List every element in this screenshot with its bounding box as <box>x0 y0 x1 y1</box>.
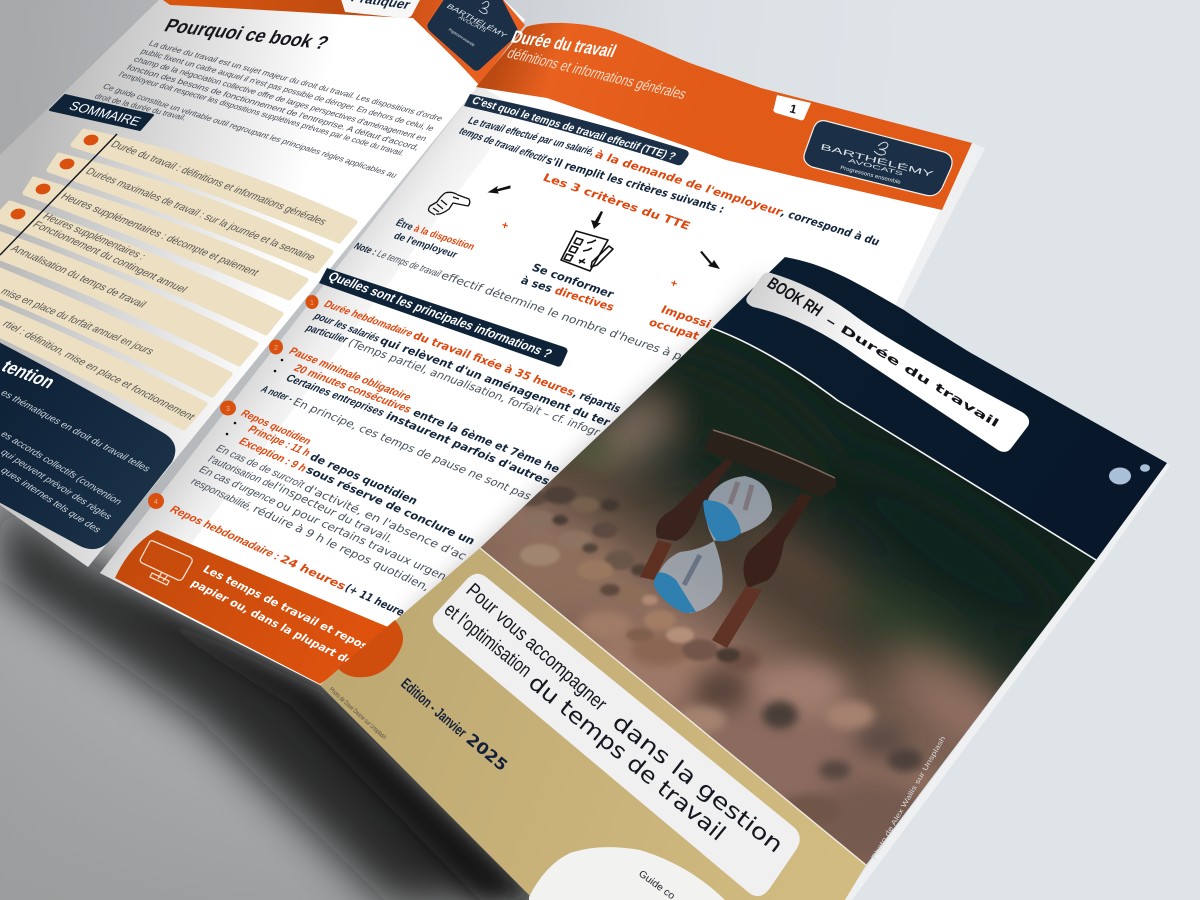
text block: principal informations: qui relèvent d'un aménagement du ter <box>377 334 613 429</box>
callout: attention <box>0 340 175 549</box>
callout: attention: ques internes tels que des <box>0 466 104 535</box>
text block: principal informations: A noter - <box>258 385 296 404</box>
text block: principal informations: En principe, ces temps de pause ne sont pas <box>290 396 534 502</box>
text block: definition: à la demande de l'employeur <box>593 148 785 218</box>
arrow: right criterion <box>700 251 720 269</box>
table of contents labels: Fonctionnement du contingent annuel <box>30 220 190 295</box>
text block: principal informations: (Temps partiel, annualisation, forfait – cf. infogr <box>345 337 603 439</box>
table of contents labels: rtiel : définition, mise en place et fonctionnement <box>0 319 197 422</box>
text block: principal informations: instaurent parfois d'autres <box>383 410 553 488</box>
header tab with title fragment <box>340 0 422 18</box>
timeline rule <box>0 134 117 255</box>
heading bar: temps de travail effectif: C'est quoi le temps de travail effectif (TTE) ? <box>469 95 678 163</box>
header band left page <box>163 0 525 85</box>
text block: introduction: l'employeur doit respecter les dispositions supplétives prévues par le code du travail. <box>117 69 407 157</box>
table of contents labels <box>0 139 329 422</box>
text block: principal informations: de repos quotidien <box>307 451 420 507</box>
heading bar: principales informations: Quelles sont les principales informations ? <box>325 269 555 361</box>
cover header band <box>712 257 1167 560</box>
photo: hourglass on rocks <box>460 320 1110 880</box>
timeline bullets <box>10 133 99 221</box>
logo: Barthélémy large: BARTHÉLÉMY <box>820 142 936 179</box>
sand lower band <box>320 548 866 900</box>
table of contents labels: Heures supplémentaires : décompte et paiement <box>58 191 261 278</box>
text block: principal informations: Repos quotidien <box>238 408 314 447</box>
text block: principal informations: 24 heures <box>277 553 349 593</box>
hourglass frame <box>705 430 836 496</box>
number markers: 3 <box>226 406 230 413</box>
criterion: directives: à ses directives <box>519 274 617 314</box>
white divider line <box>712 328 1096 560</box>
text block: definition: s'il remplit les critères suivants : <box>544 154 727 216</box>
number markers: 4 <box>154 499 158 506</box>
text block: definition: temps de travail effectif <box>456 126 549 165</box>
text block: principal informations <box>167 299 624 619</box>
logo: Barthélémy small: Progressons ensemble <box>447 27 477 47</box>
orange blob over cover <box>338 620 403 677</box>
text block: principal informations: Principe : 11 h <box>245 424 313 459</box>
logo: Barthélémy large <box>804 121 952 196</box>
table of contents labels: Annualisation du temps de travail <box>8 243 149 310</box>
white circle with guide label: Guide co <box>636 869 677 900</box>
icon: monitor <box>140 541 192 585</box>
table of contents labels: Heures supplémentaires : <box>40 211 148 262</box>
subtitle label: dans la gestion <box>607 710 787 858</box>
text block: introduction: champ de la négociation collective offre de larges perspectives d'aménagement en <box>132 54 430 143</box>
heading: Sommaire: SOMMAIRE <box>66 99 144 129</box>
logo: Barthélémy large: Progressons ensemble <box>840 165 901 186</box>
arrow: middle criterion <box>591 211 603 229</box>
inner reflections <box>730 482 752 510</box>
number markers: 2 <box>274 345 278 352</box>
number markers <box>148 295 318 509</box>
logo: Barthélémy small <box>427 0 518 71</box>
subtitle label: du temps de travail <box>523 670 730 846</box>
text block: principal informations: Exception : 9 h <box>236 436 309 474</box>
cover title label: BOOK RH <box>764 274 826 320</box>
text block: definition: Le travail effectué par un salarié, <box>465 115 597 158</box>
number markers: 1 <box>310 300 314 307</box>
subtitle label: et l'optimisation <box>440 599 535 682</box>
callout: orange banner <box>115 530 400 684</box>
text block: principal informations: Certaines entreprises <box>283 373 387 419</box>
photo credit left: Photo de Dave Deane sur Unsplash <box>328 686 388 741</box>
cover page edge <box>842 463 1170 900</box>
text block: principal informations: ou pour certains travaux urgen <box>273 498 449 583</box>
glass bulbs <box>706 476 772 541</box>
criterion: disposition: Être à la disposition <box>393 216 478 253</box>
text block: principal informations: En cas d'urgence <box>196 464 279 507</box>
header band right page <box>476 23 972 210</box>
text block: principal informations: Repos hebdomadaire : <box>167 504 283 562</box>
text block: principal informations: pour les salariés <box>311 311 383 344</box>
text block: principal informations: entre la 6ème et 7ème he <box>410 407 562 475</box>
text block: principal informations: sous réserve de conclure un <box>303 464 478 547</box>
callout: attention: es accords collectifs (convention <box>0 430 124 507</box>
white circle with guide label <box>529 847 727 900</box>
page number tab <box>773 95 811 120</box>
plus sign one: + <box>500 219 510 233</box>
callout: attention: es thématiques en droit du travail telles <box>0 388 153 474</box>
heading: Sommaire <box>50 95 153 130</box>
text block: principal informations: d'activité, en l'absence d'ac <box>301 482 469 563</box>
blurred landscape <box>582 335 1078 758</box>
criterion: directives: Se conformer <box>530 261 617 301</box>
photo credit right: Photo de Alex Wallis sur Unsplash <box>871 735 947 861</box>
table of contents labels: Durée du travail : définitions et informations générales <box>108 139 329 228</box>
icon: pointing hand <box>428 192 470 215</box>
note line <box>351 242 685 363</box>
blue sand <box>703 500 741 541</box>
text block: definition: , correspond à du <box>779 206 882 248</box>
logo: Barthélémy large: AVOCATS <box>848 158 904 178</box>
text block: principal informations: , répartis <box>570 387 624 415</box>
text block: introduction: droit de la durée du travail. <box>93 91 189 122</box>
text block: principal informations: du travail fixée à 35 heures <box>410 329 577 399</box>
text block: introduction <box>93 38 446 180</box>
blurred pebbles <box>568 436 922 864</box>
note line: effectif détermine le nombre d'heures à p <box>438 269 685 363</box>
note line: Note : Le temps de travail <box>351 242 443 279</box>
criterion: impossibilité: Impossi <box>659 303 713 331</box>
subtitle label: Pour vous accompagner <box>462 579 611 715</box>
table of contents rows <box>0 131 355 428</box>
text block: introduction: public fixent un cadre auquel il n'est pas possible de déroger. En dehors de celui, le <box>139 46 437 133</box>
white line above band <box>480 548 866 865</box>
criterion: impossibilité: occupat <box>647 316 702 343</box>
hourglass <box>640 430 836 648</box>
text block: principal informations: l'autorisation de <box>205 454 277 491</box>
plus sign two: + <box>669 277 679 291</box>
heading: Pourquoi ce book: Pourquoi ce book ? <box>161 16 332 54</box>
table of contents labels: mise en place du forfait annuel en jours <box>0 286 157 357</box>
logo: Barthélémy small: BARTHÉLÉMY <box>445 2 510 40</box>
edition date: 2025 <box>462 730 511 775</box>
edition date: Edition - Janvier <box>397 675 470 741</box>
text block: principal informations: l'inspecteur du travail. <box>270 480 396 545</box>
callout: attention: qui peuvent prévoir des règles <box>0 448 114 522</box>
panel: open brochure right page <box>100 23 985 700</box>
cover title label <box>746 272 1029 452</box>
text block: introduction: fonction des besoins de fonctionnement de l'entreprise. A défaut d'accord, <box>125 62 422 152</box>
decorative bubbles <box>1109 464 1150 484</box>
heading: 3 critères: Les 3 critères du TTE <box>541 171 693 233</box>
callout: orange banner: papier ou, dans la plupart de <box>188 577 356 668</box>
arrow: left criterion <box>489 186 510 193</box>
subtitle label <box>433 574 800 896</box>
icon: checklist clipboard <box>561 231 613 271</box>
panel: open brochure left page <box>0 0 525 567</box>
heading: Durée du travail: Durée du travail <box>508 26 620 61</box>
text block: principal informations: Durée hebdomadaire <box>321 299 416 339</box>
criterion: impossibilité <box>647 303 713 343</box>
subheading: definitions: définitions et informations générales <box>504 45 690 103</box>
text block: definition <box>456 115 882 248</box>
text block: principal informations: (+ 11 heure <box>342 582 407 619</box>
callout: orange banner: Les temps de travail et repos <box>200 563 371 653</box>
text block: principal informations: En cas de de surcroît <box>213 443 307 490</box>
table of contents labels: Durées maximales de travail : sur la journée et la semaine <box>83 166 318 263</box>
panel: front cover <box>320 257 1170 900</box>
page number tab: 1 <box>788 101 799 117</box>
text block: principal informations: réduire à 9 h le repos quotidien, <box>250 503 433 593</box>
text block: principal informations: Pause minimale obligatoire <box>286 346 414 403</box>
text block: introduction: Ce guide constitue un véritable outil regroupant les principales règles applicables au <box>101 82 400 180</box>
text block: principal informations: particulier <box>303 323 351 346</box>
text block: principal informations: 20 minutes consécutives <box>291 363 414 415</box>
criterion: disposition: de l'employeur <box>391 231 459 261</box>
list bullets <box>226 359 283 435</box>
text block: introduction: La durée du travail est un sujet majeur du droit du travail. Les dispositions d'ordre <box>147 38 446 123</box>
cover shadow on page <box>400 268 770 640</box>
cover title label: – Durée du travail <box>823 313 1001 430</box>
logo: Barthélémy small: AVOCATS <box>457 15 488 34</box>
text block: principal informations: responsabilité, <box>188 476 255 513</box>
